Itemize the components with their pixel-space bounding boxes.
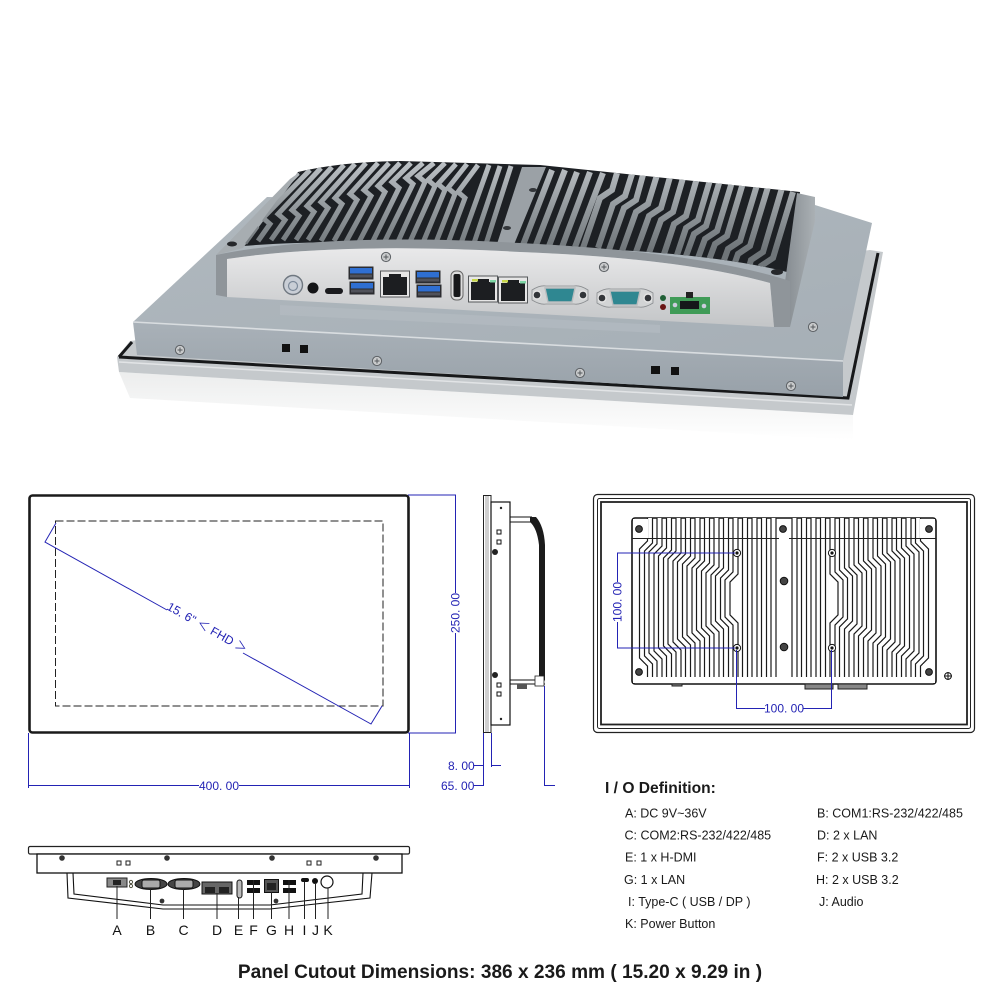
status LEDs [660,295,666,310]
square vent holes [282,344,679,375]
bottom view chassis [37,854,402,873]
dual LAN port [468,276,528,303]
I/O definition list: F: 2 x USB 3.2 [817,850,898,864]
panel reflection [119,372,853,440]
chassis mounting holes [227,242,783,275]
VESA vertical dimension: 100. 00 [610,582,624,622]
bezel highlight [119,362,852,405]
side bezel [484,496,491,732]
I/O definition list: B: COM1:RS-232/422/485 [817,806,963,820]
depth dimension 65.00 [441,686,555,793]
rear plate top surface [133,197,872,361]
port letters: F [249,922,258,938]
port letters: B [146,922,155,938]
port C COM2 [168,878,200,890]
I/O definition list: A: DC 9V~36V [625,806,707,820]
port letters: A [112,922,122,938]
rear frame outlines [594,494,974,732]
I/O definition list: J: Audio [819,895,864,909]
I/O definition list: I: Type-C ( USB / DP ) [628,895,750,909]
port I type-C [301,878,309,882]
lower screws [160,899,278,903]
black gasket [119,253,878,398]
bottom view bezel [28,846,410,854]
silver I/O panel [227,248,774,327]
height dimension: 250. 00 [448,593,462,633]
DC power terminal [670,292,710,314]
USB ports [348,266,442,298]
port letters: K [323,922,333,938]
heatsink left slope [216,172,300,255]
ground symbol [944,672,952,680]
heatsink right side [785,193,815,327]
port E HDMI [237,880,242,898]
I/O definition list [624,806,963,931]
I/O definition list: H: 2 x USB 3.2 [816,873,899,887]
I/O definition list: K: Power Button [625,917,715,931]
plate edge highlight [133,322,843,361]
VESA horizontal dimension: 100. 00 [764,702,804,716]
VESA horizontal dimension [736,650,832,716]
diagonal label: 15. 6" ＜ FHD ＞ [165,599,250,656]
heatsink fins, left group [245,163,511,247]
VESA holes [733,549,836,652]
chassis vents [117,861,321,865]
side vents and screws [492,507,502,720]
centre bar and corner blocks [633,519,935,683]
rear plate front face [133,322,843,397]
port G LAN [264,880,278,892]
port letters: J [312,922,319,938]
port A power terminal [107,878,133,888]
port leader lines [117,880,328,919]
rear screws [636,526,932,675]
heatsink centre bar [496,167,546,247]
port F USB [247,880,260,893]
I/O definition list: G: 1 x LAN [624,873,685,887]
product photo: rear view of panel PC [117,161,883,440]
type-c port [325,288,343,294]
I/O definition list: E: 1 x H-DMI [625,850,697,864]
width dimension [28,733,410,793]
port reflections on plate [280,305,660,333]
HDMI port [451,271,463,300]
COM ports [532,286,653,307]
thickness dimension 8.00 [448,733,501,786]
port letters: E [234,922,243,938]
chassis frame [216,239,790,327]
heatsink fin background [243,161,800,272]
front panel outline [30,496,408,732]
VESA vertical dimension [610,553,735,648]
icon: power button [284,276,302,294]
port K power button [321,876,333,888]
I/O side drawing [28,846,410,938]
audio jack [308,282,318,294]
port letters: C [178,922,189,938]
port J audio [312,878,318,884]
front view drawing [28,496,410,793]
side chassis [491,502,510,725]
rear connectors [672,684,867,689]
heatsink fins, right group [523,170,793,270]
port letters: I [303,922,306,938]
height dimension [408,495,462,733]
rear heatsink body [632,518,936,684]
I/O definition list: C: COM2:RS-232/422/485 [624,828,771,842]
port D LAN [202,882,232,894]
I/O definition list: D: 2 x LAN [817,828,877,842]
diagonal dimension [45,523,382,724]
depth dimension 65.00: 65. 00 [441,779,475,793]
panel cutout caption: Panel Cutout Dimensions: 386 x 236 mm ( 15.20 x 9.29 in ) [238,962,762,983]
panel screws [175,252,818,391]
chassis screws [59,855,379,861]
port B COM1 [135,878,167,890]
side view drawing [408,495,555,793]
heatsink curve [67,873,372,909]
rear heatsink fins [632,518,936,677]
width dimension: 400. 00 [199,779,239,793]
port letters [112,922,333,938]
I/O definition heading: I / O Definition: [605,780,716,797]
display area dashed outline [56,521,383,706]
rear view drawing [594,494,974,732]
port letters: G [266,922,277,938]
thickness dimension 8.00: 8. 00 [448,759,475,773]
LAN port [380,271,410,297]
port letters: H [284,922,294,938]
port letters: D [212,922,222,938]
port H USB [283,880,296,893]
side heatsink [510,517,545,689]
front bezel [117,250,883,415]
